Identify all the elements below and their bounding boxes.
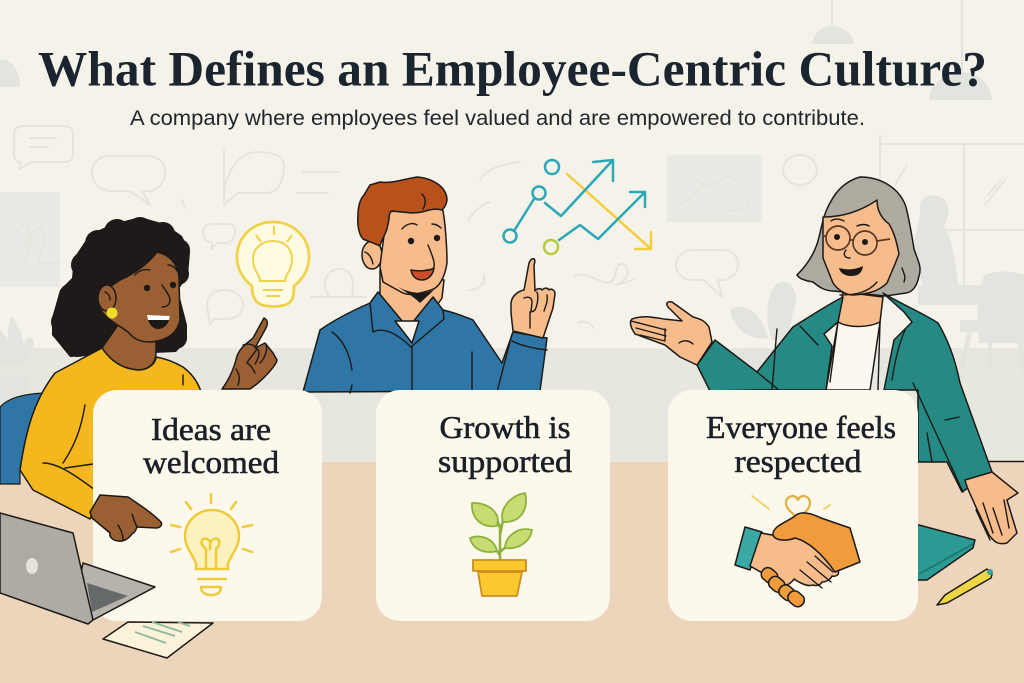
undershirt (395, 321, 419, 343)
glasses (823, 226, 890, 255)
silhouette decor (0, 0, 1024, 405)
card: Everyone feels respected: respected (734, 443, 862, 479)
icon: handshake (735, 513, 860, 609)
face (99, 252, 180, 342)
card: Everyone feels respected: Everyone feels (706, 409, 896, 445)
pencil on table (937, 569, 993, 605)
paper on table (103, 622, 213, 658)
neck (380, 270, 444, 342)
person: woman with yellow sweater (0, 217, 277, 519)
notebook on table (905, 525, 975, 580)
hair (51, 217, 190, 357)
card: Ideas are welcomed: Ideas are (151, 411, 271, 447)
left open hand (631, 302, 712, 365)
ear (362, 241, 382, 269)
neck and face (838, 292, 883, 327)
earring (106, 308, 118, 318)
pointing hand raised (222, 318, 277, 389)
hair (358, 177, 447, 246)
neck (102, 325, 156, 370)
hair back (797, 177, 920, 296)
chair (0, 393, 43, 484)
right open hand (965, 472, 1018, 544)
person: man in blue shirt (303, 177, 555, 393)
person: woman in teal jacket (631, 177, 1018, 544)
white shirt (826, 322, 880, 390)
icon: potted plant (470, 493, 532, 596)
card: Growth is supported: Growth is (440, 409, 570, 445)
card: Ideas are welcomed (93, 390, 322, 621)
laptop (0, 513, 155, 624)
card: Growth is supported: supported (438, 443, 572, 479)
shirt (303, 292, 547, 392)
table (0, 462, 1024, 683)
sweater (20, 348, 240, 519)
card: Everyone feels respected (668, 390, 918, 621)
raised hand (511, 259, 555, 338)
card: Growth is supported (376, 390, 610, 621)
floating icon: growth arrows (504, 160, 651, 254)
face (380, 207, 447, 294)
subtitle: A company where employees feel valued and are empowered to contribute. (130, 107, 865, 130)
floating icon: glowing lightbulb (237, 222, 309, 306)
ear (98, 285, 116, 311)
title: What Defines an Employee-Centric Culture? (38, 40, 987, 96)
icon: heart (752, 496, 830, 518)
jacket (697, 293, 992, 492)
icon: lightbulb (171, 494, 252, 595)
woman's pointing hand over card (90, 495, 162, 541)
card: Ideas are welcomed: welcomed (143, 444, 279, 480)
